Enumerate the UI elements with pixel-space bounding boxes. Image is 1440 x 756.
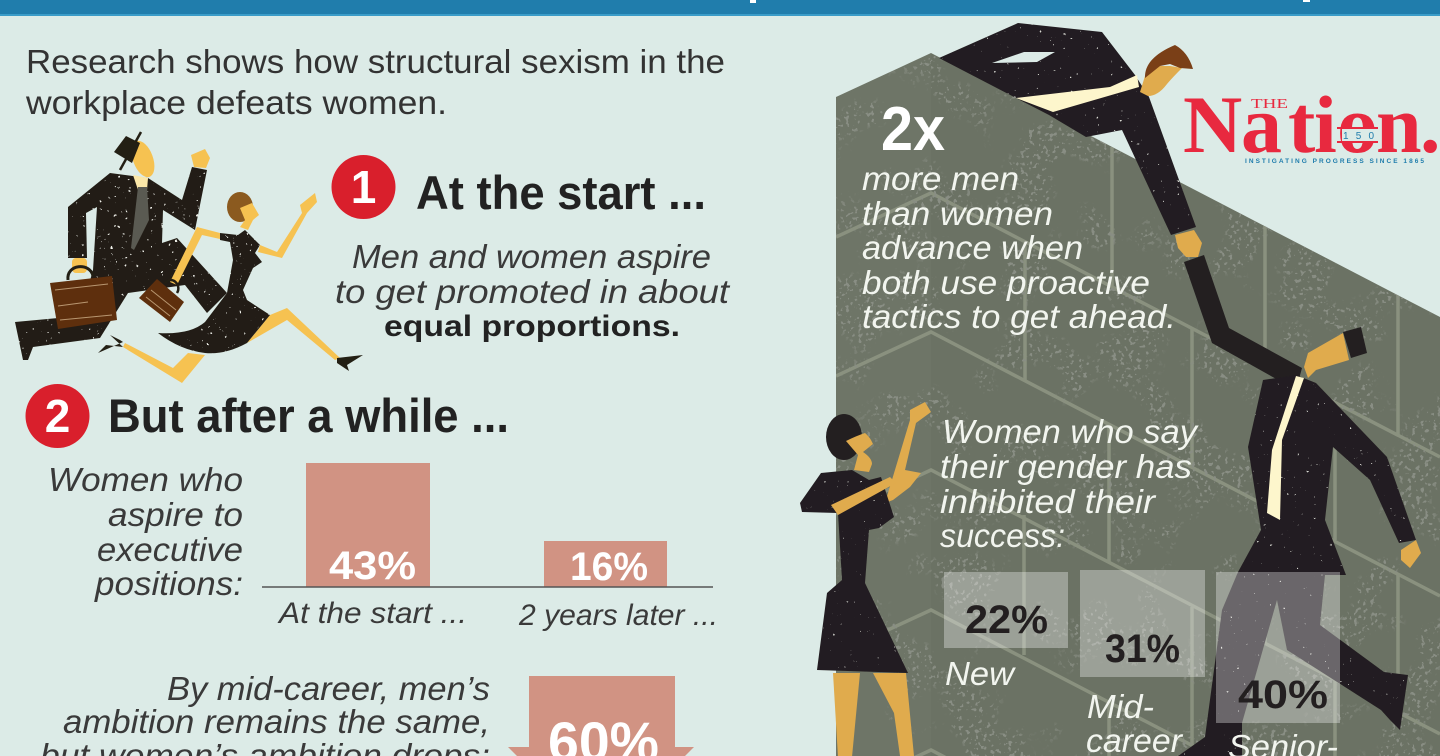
- stat: 2x: advance when: [862, 229, 1083, 266]
- section 2: [26, 384, 509, 448]
- bar chart label: Women who: [48, 461, 243, 498]
- running man: [15, 132, 227, 360]
- small briefcase: [139, 279, 184, 322]
- body text: section 1: [335, 238, 731, 343]
- illustration: woman at wall: [800, 402, 931, 756]
- text: women who say: [940, 413, 1200, 554]
- bar: senior 40%: 40%: [1238, 673, 1328, 717]
- bar: new 22%: [944, 572, 1068, 692]
- brick wall: [836, 50, 1440, 756]
- illustration: man on top of wall: [939, 23, 1202, 257]
- bar: mid-career 31%: [1080, 570, 1205, 756]
- heading: but after a while: But after a while ...: [108, 389, 509, 442]
- bar chart: [262, 463, 718, 632]
- bar chart label: executive: [97, 531, 243, 568]
- intro text: Research shows how structural sexism in the: [26, 43, 725, 80]
- stat: 2x: than women: [862, 195, 1053, 232]
- number badge 1: 1: [351, 161, 376, 213]
- running woman: [98, 192, 363, 383]
- text: women who say: Women who say: [942, 413, 1200, 450]
- bar chart label: aspire to: [108, 496, 243, 533]
- bar: mid-career 31%: Mid-: [1087, 688, 1154, 725]
- logo: The Nation: INSTIGATING PROGRESS SINCE 1865: [1245, 158, 1424, 165]
- number badge 1: [332, 155, 396, 219]
- bar: mid-career 31%: 31%: [1105, 627, 1180, 671]
- number badge 2: 2: [45, 390, 70, 442]
- briefcase: [50, 267, 117, 329]
- stat: 2x: tactics to get ahead.: [862, 298, 1176, 335]
- bar chart: 2 years later ...: [518, 599, 718, 632]
- illustration: running man and woman: [15, 132, 363, 383]
- header band: [0, 0, 1440, 16]
- stat: 2x: more men: [862, 160, 1019, 197]
- stat: 2x: [862, 95, 1176, 335]
- down arrow 60%: [508, 676, 694, 756]
- logo: The Nation: THE: [1251, 97, 1288, 112]
- bar: senior 40%: [1216, 572, 1340, 756]
- section 1: [332, 155, 731, 343]
- logo: The Nation: Nation.: [1183, 79, 1440, 170]
- stat: 2x: both use proactive: [862, 264, 1150, 301]
- illustration: man being pulled up: [1178, 255, 1421, 756]
- heading: at the start: At the start ...: [416, 166, 706, 219]
- mid-career text: ambition remains the same,: [63, 703, 490, 740]
- mid-career text: By mid-career, men’s: [167, 670, 490, 707]
- stat: 2x: 2x: [881, 95, 945, 164]
- text: women who say: inhibited their: [940, 483, 1157, 520]
- logo: The Nation: 150: [1343, 131, 1374, 142]
- body text: section 1: to get promoted in about: [335, 273, 731, 310]
- bar chart label: positions:: [94, 565, 243, 602]
- bar: new 22%: New: [945, 655, 1016, 692]
- bar chart: 16%: [570, 545, 648, 589]
- intro text: [25, 43, 725, 121]
- bar chart: At the start ...: [277, 597, 467, 630]
- number badge 2: [26, 384, 90, 448]
- text: women who say: their gender has: [940, 448, 1192, 485]
- bar: new 22%: 22%: [965, 598, 1048, 642]
- bar chart label: [48, 461, 243, 602]
- intro text: workplace defeats women.: [25, 84, 447, 121]
- text: women who say: success:: [940, 517, 1065, 554]
- mortar lines: [836, 147, 1440, 756]
- bar chart: 43%: [329, 544, 416, 588]
- mid-career text: [40, 670, 490, 756]
- body text: section 1: equal proportions.: [384, 310, 680, 343]
- body text: section 1: Men and women aspire: [352, 238, 711, 275]
